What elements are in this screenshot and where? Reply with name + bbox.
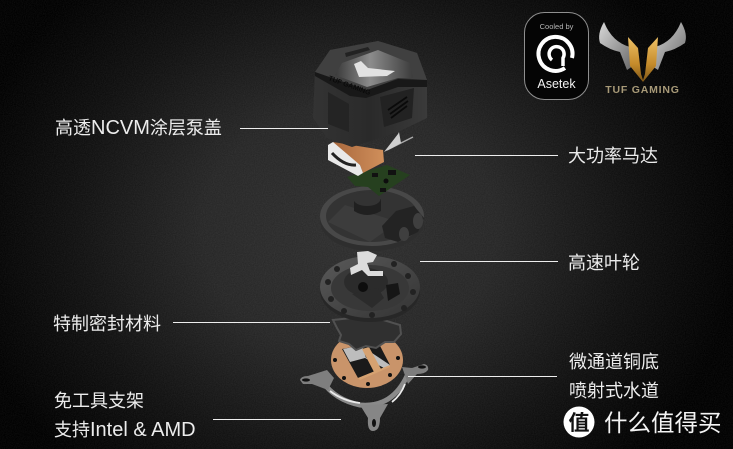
callout: pump cover: 高透NCVM涂层泵盖 (55, 117, 222, 139)
upper housing (320, 186, 424, 251)
watermark: 什么值得买: 值 (568, 412, 590, 435)
callout: impeller: 高速叶轮 (568, 253, 640, 273)
callout: motor: 大功率马达 (568, 146, 658, 166)
callout: copper base and jet channel (408, 352, 659, 401)
logo: Cooled by Asetek: Asetek (537, 77, 576, 91)
copper base (331, 332, 403, 388)
mounting bracket (300, 364, 428, 431)
callout: seal material: 特制密封材料 (53, 314, 161, 334)
copper motor (328, 132, 413, 176)
lower disc (320, 256, 420, 322)
impeller (350, 251, 383, 276)
callout: bracket: 免工具支架 (54, 391, 144, 411)
callout: copper base and jet channel: 微通道铜底 (569, 352, 659, 372)
logo: TUF Gaming: TUF GAMING (605, 84, 680, 96)
watermark: 什么值得买 (564, 406, 722, 438)
callout: bracket (54, 391, 341, 441)
watermark: 什么值得买: 什么值得买 (604, 410, 722, 436)
circuit board (347, 165, 410, 196)
logo: Cooled by Asetek: Cooled by (540, 22, 574, 31)
seal (333, 316, 401, 350)
logo: Cooled by Asetek (524, 12, 588, 100)
callout: copper base and jet channel: 喷射式水道 (569, 381, 659, 401)
pump cover (313, 41, 427, 147)
callout: bracket: 支持Intel & AMD (54, 419, 196, 441)
logo: TUF Gaming (599, 22, 686, 96)
icon: exploded pump assembly (300, 41, 428, 431)
pump cover: TUF GAMING (327, 75, 372, 97)
